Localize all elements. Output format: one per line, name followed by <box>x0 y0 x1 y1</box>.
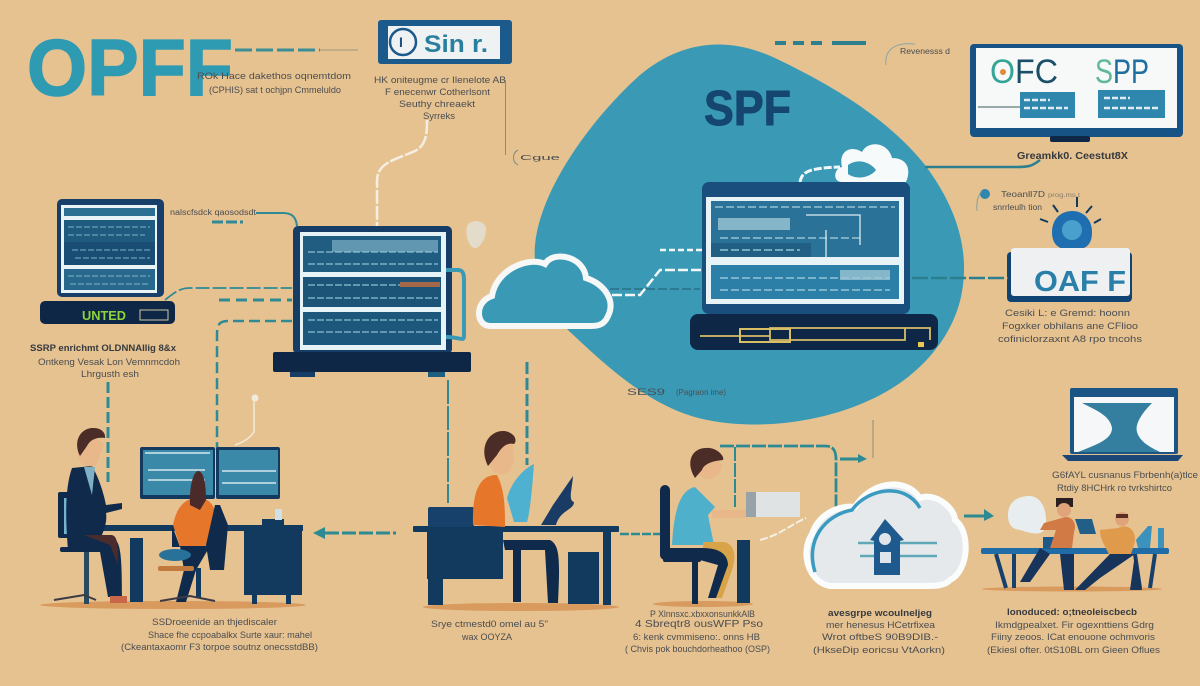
text block: bottom right scene caption: Fiiny zeoos. ICat enouone ochmvoris <box>991 632 1155 643</box>
text block: bottom right laptop caption <box>1052 470 1198 494</box>
top right monitor comparing OFC and SPP: SPP <box>1095 53 1149 91</box>
text block: top centre description: F enecenwr Cotherlsont <box>385 87 490 98</box>
text block: left scene caption: Shace fhe ccpoabalkx Surte xaur: mahel <box>148 630 312 641</box>
box: OSF card: OAF F <box>1034 266 1126 298</box>
label: SES9 <box>627 387 726 398</box>
label: Revenesss <box>886 44 950 65</box>
connector: monitor caption to cloud <box>925 160 1040 167</box>
text block: left laptop description: SSRP enrichmt OLDNNAIlig 8&x <box>30 343 177 354</box>
bottom right laptop <box>1062 388 1183 461</box>
connectors: white links around the large laptop <box>610 167 840 295</box>
scene: man at desk with laptop and tower <box>413 431 619 611</box>
text block: left laptop description: Lhrgusth esh <box>81 369 139 380</box>
text block: bottom right laptop caption: Rtdiy 8HCHrk ro tvrkshirtco <box>1057 483 1172 494</box>
text block: OPFF description: (CPHIS) sat t ochjpn Cmmeluldo <box>209 85 341 96</box>
icon: top OSF screen: I <box>399 34 403 50</box>
label: small note with eye icon: prog.ms.t <box>1048 193 1080 199</box>
text block: left laptop description: Ontkeng Vesak Lon Vemnmcdoh <box>38 357 180 368</box>
text block: bottom right scene caption: (Ekiesl ofter. 0tS10BL orn Gieen Oflues <box>987 645 1160 656</box>
icon: lightbulb <box>1040 197 1101 250</box>
text block: OSF card description: Fogxker obhilans ane CFlioo <box>1002 321 1138 332</box>
monitors <box>140 447 280 499</box>
icon: top OSF screen <box>378 20 512 64</box>
text block: bottom right laptop caption: G6fAYL cusnanus Fbrbenh(a)tlce <box>1052 470 1198 481</box>
label: Revenesss: Revenesss d <box>900 46 950 56</box>
text block: bottom right scene caption <box>987 607 1160 656</box>
first person <box>1020 498 1075 590</box>
desk <box>100 509 303 604</box>
text block: centre scene caption <box>431 619 548 643</box>
connectors: teal links between the laptops <box>108 213 527 503</box>
text block: seated man caption: 4 Sbreqtr8 ousWFP Pso <box>635 618 763 630</box>
text block: bottom right scene caption: lonoduced: o;tneoleiscbecb <box>1007 607 1137 618</box>
box: OSF card <box>1007 248 1132 302</box>
label: left laptop caption: nalscfsdck qaosodsdt <box>170 208 257 217</box>
large cloud with house icon <box>806 484 966 586</box>
text block: seated man caption: ( Chvis pok bouchdorheathoo (OSP) <box>625 644 770 655</box>
text block: OSF card description <box>998 308 1142 345</box>
woman from behind <box>158 471 228 602</box>
text block: large cloud caption: avesgrpe wcoulneljeg <box>828 608 932 619</box>
text block: bottom right scene caption: Ikmdgpealxet. Fir ogexnttiens Gdrg <box>995 620 1154 631</box>
label: small note with eye icon <box>977 189 1080 212</box>
text block: seated man caption: 6: kenk cvmmiseno:. onns HB <box>633 632 760 643</box>
dark laptop <box>541 476 574 525</box>
top right monitor comparing OFC and SPP: OFC <box>990 53 1058 91</box>
text block: large cloud caption: Wrot oftbeS 90B9DIB.- <box>822 632 938 643</box>
label: monitor caption: Greamkk0. Ceestut8X <box>1017 150 1128 162</box>
man in suit <box>54 428 127 604</box>
heading: SPF: SPF <box>704 82 791 136</box>
globe <box>1008 496 1046 534</box>
text block: top centre description: Seuthy chreaekt <box>399 99 475 110</box>
text block: seated man caption <box>625 609 770 655</box>
label: small note with icon: Cgue <box>520 153 560 162</box>
text block: top centre description: HK oniteugme cr Ilenelote AB <box>374 75 506 86</box>
top dashed arrow <box>775 41 870 45</box>
text block: top centre description: Syrreks <box>423 111 455 122</box>
second person <box>1075 512 1164 590</box>
desk <box>413 507 619 605</box>
text block: centre scene caption: wax OOYZA <box>461 632 513 643</box>
scene: two people at the monitors <box>40 428 306 609</box>
scene: two people at a shared table <box>981 496 1169 592</box>
text block: left scene caption: SSDroeenide an thjediscaler <box>152 617 277 628</box>
text block: OSF card description: cofiniclorzaxnt A8 rpo tncohs <box>998 334 1142 345</box>
scene: seated man in teal shirt <box>653 448 800 607</box>
text block: left scene caption <box>121 617 318 653</box>
teal screen <box>507 464 534 522</box>
connector: thin vertical line <box>504 80 506 155</box>
connector: white dashed curve <box>377 120 427 226</box>
title: OPFF: OPFF <box>27 23 233 112</box>
text block: centre scene caption: Srye ctmestd0 omel au 5" <box>431 619 548 630</box>
label: small note with icon <box>514 150 560 165</box>
left server laptop: UNTED <box>82 308 126 323</box>
text block: seated man caption: P Xlnnsxc.xbxxonsunkkAlB <box>650 609 755 620</box>
label: SES9: (Pagraon ime) <box>676 387 726 397</box>
connector: laptop to OSF card <box>912 277 1008 279</box>
centre cloud <box>479 256 611 326</box>
top right monitor comparing OFC and SPP <box>970 44 1183 142</box>
text block: large cloud caption: (HkseDip eoricsu VtAorkn) <box>813 645 945 656</box>
icon: small white node <box>252 394 258 402</box>
label: small note with eye icon: Teoanll7D <box>1001 189 1045 199</box>
left server laptop <box>40 199 175 324</box>
text block: top centre description <box>374 75 506 122</box>
text block: OPFF description <box>197 71 351 96</box>
icon: small floating device <box>466 221 486 248</box>
centre server laptop <box>273 226 471 377</box>
label: SES9: SES9 <box>627 387 665 398</box>
text block: OPFF description: ROk Hace dakethos oqnemtdom <box>197 71 351 82</box>
label: small note with eye icon: snrrleulh tion <box>993 202 1042 212</box>
icon: top OSF screen: Sin r. <box>424 31 488 58</box>
large teal blob background <box>535 45 964 424</box>
connector: dashes between desks <box>620 533 660 535</box>
text block: OSF card description: Cesiki L: e Gremd: hoonn <box>1005 308 1130 319</box>
connector: teal line to large cloud <box>720 420 873 540</box>
text block: left scene caption: (Ckeantaxaomr F3 torpoe soutnz onecsstdBB) <box>121 642 318 653</box>
computer tower <box>568 552 599 604</box>
text block: large cloud caption: mer henesus HCetrfixea <box>826 620 936 631</box>
text block: left laptop description <box>30 343 180 380</box>
arrow: cloud to team <box>964 509 994 521</box>
arrow: pointing left to desk <box>313 527 396 539</box>
text block: large cloud caption <box>813 608 945 656</box>
large server laptop with cloud <box>690 144 938 350</box>
table <box>981 519 1169 588</box>
man in orange <box>473 431 559 603</box>
